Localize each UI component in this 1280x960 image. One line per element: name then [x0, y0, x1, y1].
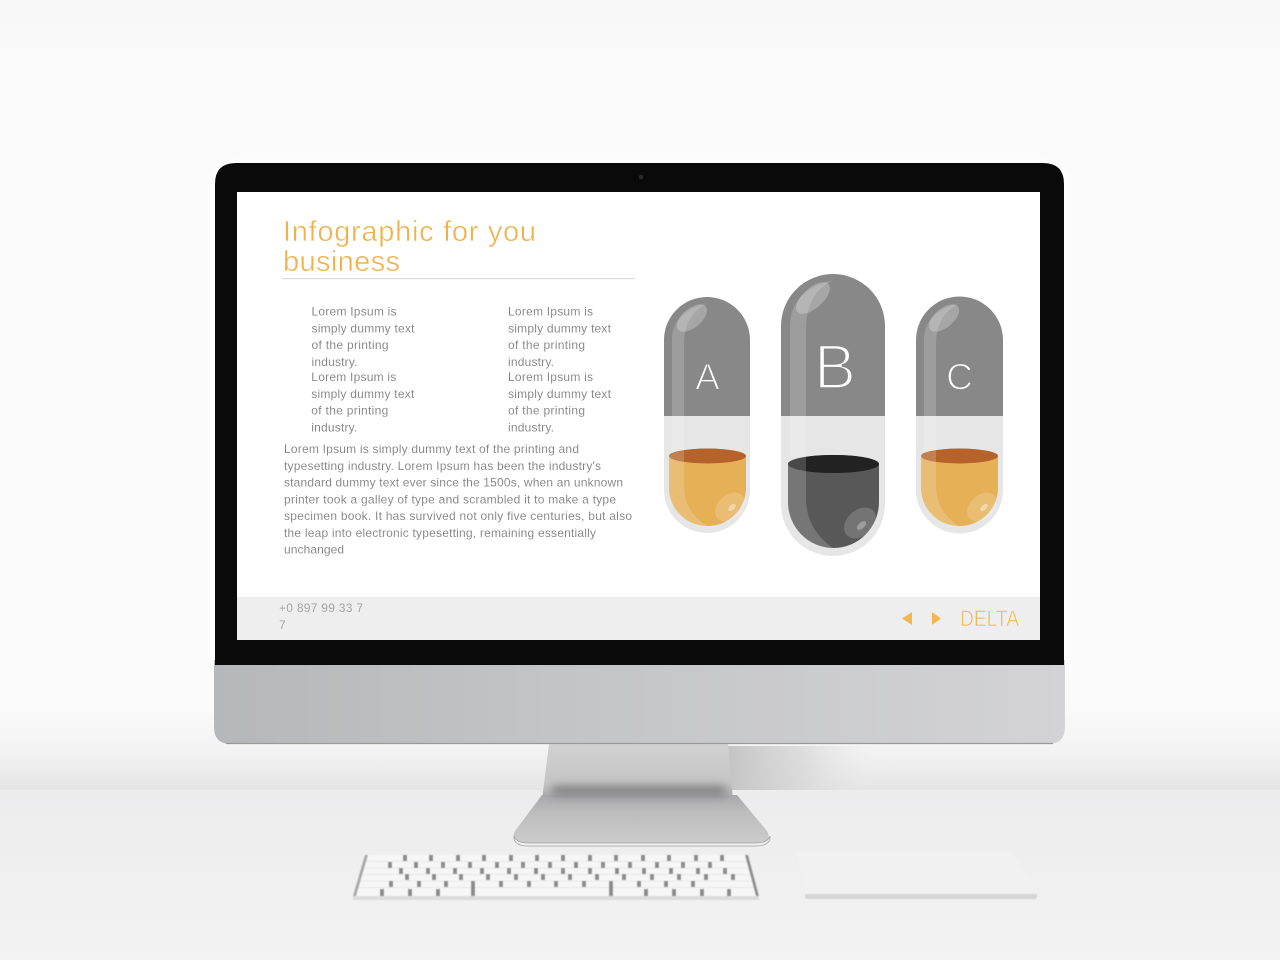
title rule: [282, 278, 635, 279]
screen footer band: [237, 597, 1040, 640]
phone number: +0 897 99 33 7: [279, 601, 363, 615]
main paragraph: Lorem Ipsum is simply dummy text of the printing and: [284, 442, 579, 456]
text block: bottom left: of the printing: [311, 404, 388, 418]
desk surface: [0, 790, 1280, 960]
capsule C clear lower shell: [916, 416, 1003, 534]
capsule B clear lower shell: [781, 416, 885, 556]
text block: top right: industry.: [508, 355, 554, 369]
screen: [237, 192, 1040, 640]
main paragraph: typesetting industry. Lorem Ipsum has been the industry's: [284, 459, 601, 473]
keyboard left edge: [353, 855, 368, 896]
text block: top left: of the printing: [312, 338, 388, 352]
text block: bottom left: Lorem Ipsum is: [311, 370, 396, 384]
arrow: next: [932, 612, 941, 625]
capsule C liquid: [921, 449, 998, 526]
capsule A top glare: [672, 299, 712, 337]
capsule C glare spot: [979, 503, 989, 512]
main paragraph: unchanged: [284, 542, 344, 556]
title: [283, 216, 536, 278]
camera: [639, 175, 643, 179]
main paragraph: specimen book. It has survived not only five centuries, but also: [284, 509, 632, 523]
key row lines: [356, 862, 756, 888]
capsule C grey cap: [916, 296, 1003, 416]
trackpad front edge: [805, 894, 1037, 899]
capsule A: [664, 297, 751, 533]
keyboard right edge: [745, 855, 759, 896]
capsule A liquid surface: [669, 448, 746, 464]
main paragraph: [284, 442, 632, 556]
text block: top left: Lorem Ipsum is: [312, 304, 396, 318]
stand foot: [513, 795, 769, 843]
keyboard front edge: [353, 896, 759, 900]
capsule A bottom glare: [709, 487, 751, 527]
foot edge highlight: [514, 836, 770, 846]
text block: bottom left: simply dummy text: [311, 387, 415, 401]
text block: top right: Lorem Ipsum is: [508, 304, 593, 318]
capsule C bottom glare: [961, 487, 1003, 527]
stand neck: [542, 744, 733, 800]
capsule A liquid highlight: [669, 451, 707, 526]
capsule A letter: A: [695, 356, 720, 398]
capsule B top glare: [791, 277, 835, 319]
capsule A grey cap: [664, 297, 750, 416]
key gaps: [380, 855, 735, 896]
text block: bottom right: Lorem Ipsum is: [508, 370, 593, 384]
trackpad: [797, 852, 1037, 899]
capsule C top glare: [924, 299, 964, 337]
brand label: DELTA: [960, 606, 1019, 631]
phone number: [279, 601, 363, 632]
capsule A liquid: [669, 449, 746, 526]
text block: top left: industry.: [312, 355, 358, 369]
capsule C liquid surface: [921, 448, 998, 464]
capsule B liquid highlight: [788, 456, 833, 548]
monitor chin: [214, 660, 1065, 744]
text block: bottom right: simply dummy text: [508, 387, 612, 401]
capsule B bottom glare: [838, 501, 882, 545]
text block: bottom right: of the printing: [508, 404, 585, 418]
title: Infographic for you: [283, 216, 536, 248]
capsule B liquid surface: [788, 455, 879, 473]
monitor bezel: [215, 163, 1064, 665]
capsule C liquid highlight: [921, 451, 959, 526]
text block: bottom right: [508, 370, 612, 434]
arrow: previous: [902, 612, 912, 625]
capsule B grey cap: [781, 274, 885, 416]
text block: bottom left: [311, 370, 415, 434]
capsule C upper highlight: [924, 303, 960, 451]
capsule A clear lower shell: [664, 416, 750, 533]
neck contact shadow: [552, 786, 726, 795]
capsule B: [781, 274, 885, 556]
capsule B liquid: [788, 455, 879, 548]
text block: top left: [312, 304, 415, 369]
capsule B letter: B: [814, 332, 856, 402]
monitor: [211, 160, 1068, 846]
text block: bottom right: industry.: [508, 420, 554, 434]
capsule B glare spot: [855, 520, 868, 531]
title: business: [283, 246, 400, 278]
monitor glow: [211, 160, 1068, 690]
capsule A glare spot: [727, 503, 737, 512]
chin bottom edge: [226, 742, 1053, 744]
text block: bottom left: industry.: [311, 420, 357, 434]
main paragraph: standard dummy text ever since the 1500s, when an unknown: [284, 476, 623, 490]
text block: top right: [508, 304, 612, 369]
text block: top left: simply dummy text: [312, 321, 415, 335]
main paragraph: the leap into electronic typesetting, remaining essentially: [284, 526, 596, 540]
main paragraph: printer took a galley of type and scrambled it to make a type: [284, 492, 616, 506]
trackpad surface: [797, 852, 1037, 894]
capsule A upper highlight: [672, 303, 708, 451]
keyboard: [353, 855, 759, 900]
capsule B upper highlight: [790, 280, 834, 456]
capsule C: [916, 296, 1003, 534]
text block: top right: simply dummy text: [508, 321, 612, 335]
text block: top right: of the printing: [508, 338, 585, 352]
stand shadow: [728, 746, 878, 790]
capsule C letter: C: [946, 356, 973, 398]
phone number: 7: [279, 618, 286, 632]
keyboard body: [353, 855, 759, 900]
